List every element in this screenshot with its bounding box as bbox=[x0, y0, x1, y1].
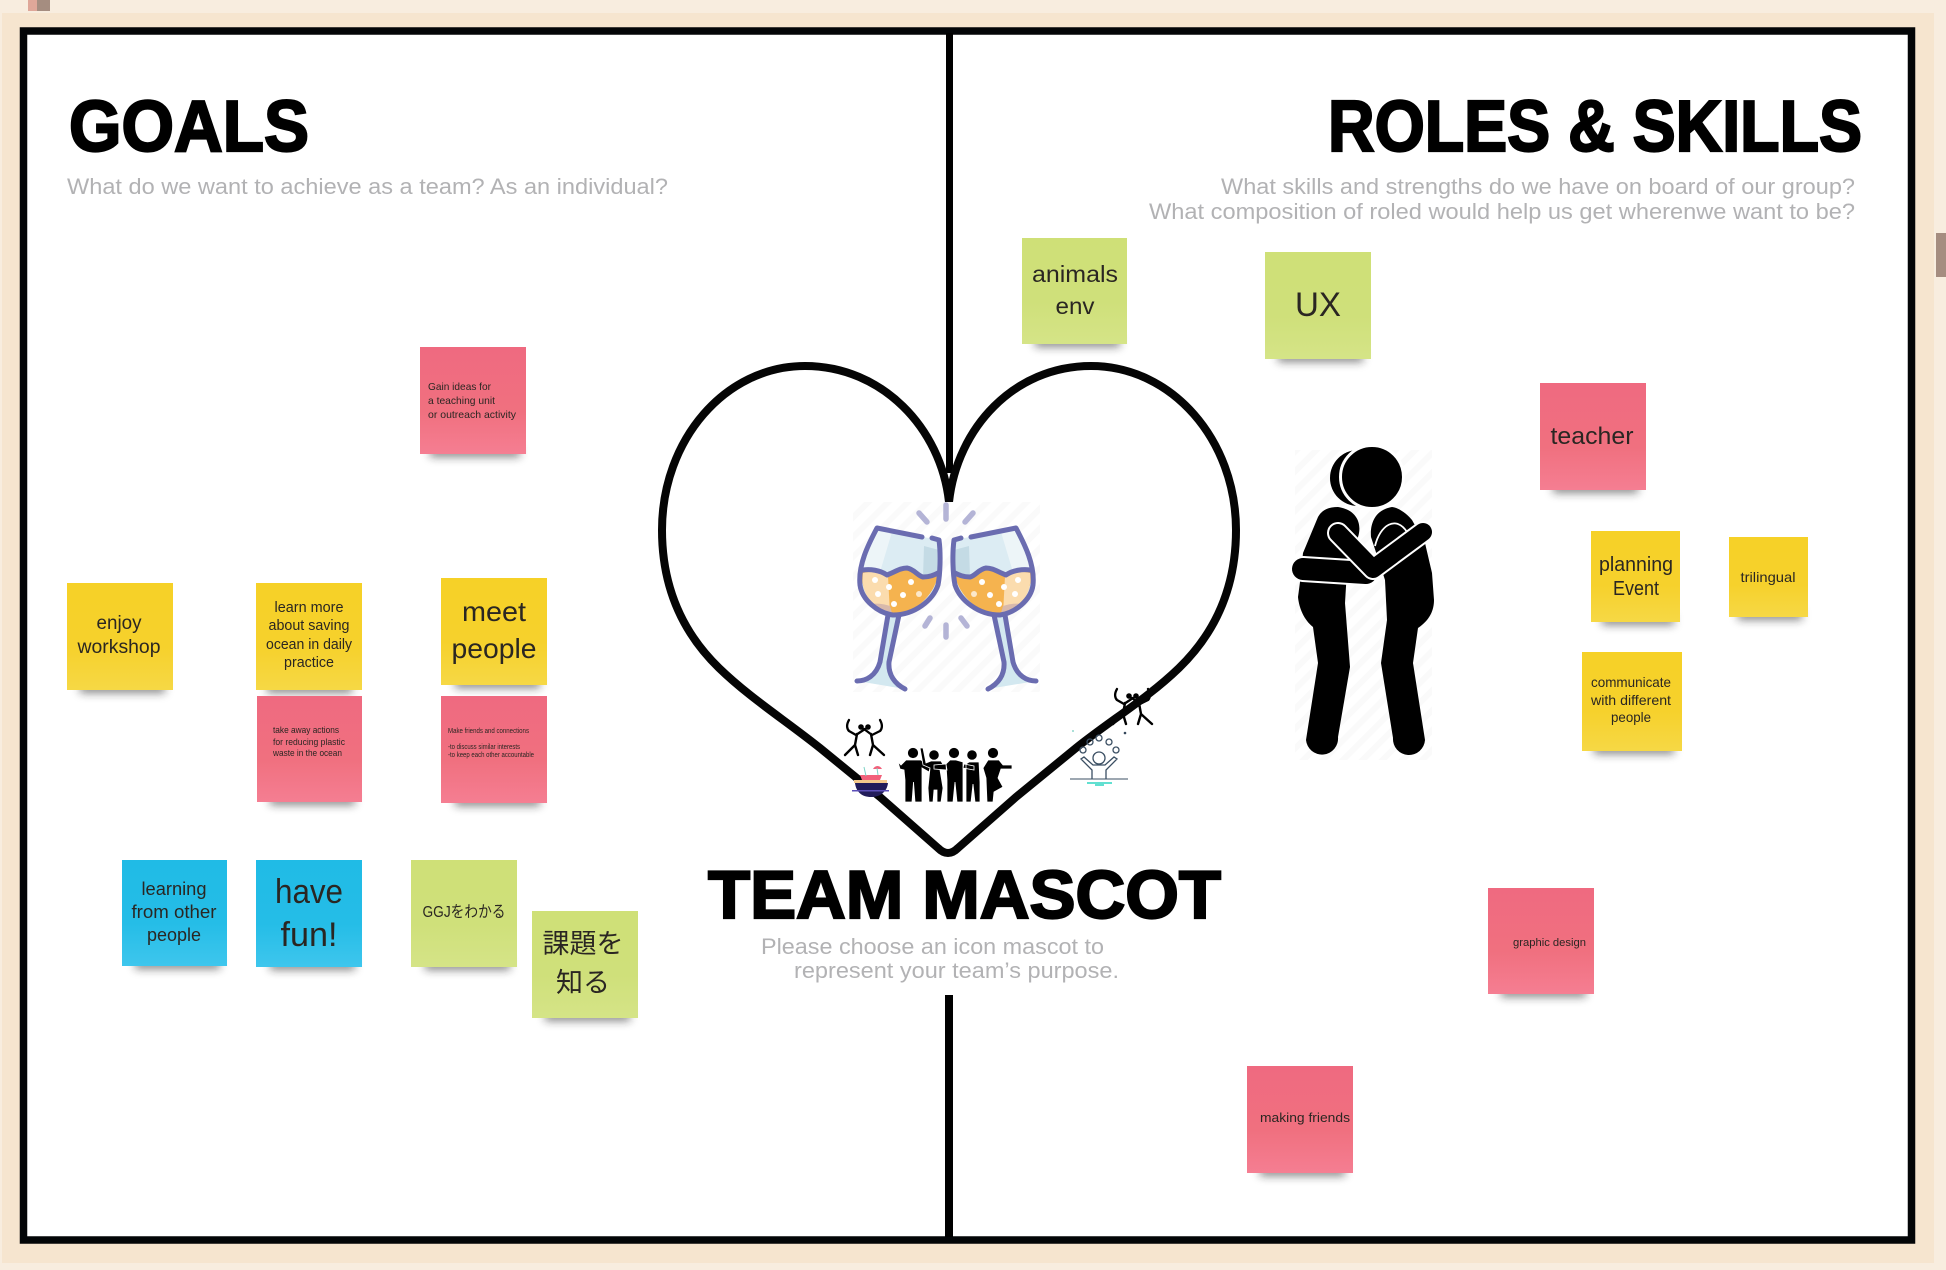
subtitle: team mascot: Please choose an icon mascot to bbox=[761, 934, 1104, 959]
sticky note: take away actions: take away actions bbox=[273, 725, 339, 736]
sticky note: planning event: planning bbox=[1599, 554, 1673, 576]
title: team mascot: TEAM MASCOT bbox=[708, 857, 1221, 933]
heart outline bbox=[662, 366, 1236, 853]
sticky note: learning from other people: from other bbox=[132, 902, 217, 922]
sticky note: learn more: about saving bbox=[268, 618, 350, 634]
icon: ice cream boat bbox=[852, 766, 889, 797]
sticky note: take away actions bbox=[257, 696, 362, 805]
icon: jumping couple upper right bbox=[1113, 689, 1152, 724]
sticky note: make friends: -to discuss similar interests bbox=[448, 744, 520, 751]
icon: clink sparks bbox=[919, 505, 973, 637]
sticky note: have fun: fun! bbox=[280, 916, 338, 954]
sticky note: animals env: animals bbox=[1032, 261, 1118, 287]
subtitle: roles and skills bbox=[1149, 174, 1855, 224]
sticky note: communicate: with different bbox=[1590, 692, 1671, 708]
hug: shoulder contour bbox=[1375, 523, 1407, 546]
sticky note: learn more: learn more bbox=[274, 600, 344, 616]
sticky note: learn the issue: 課題を bbox=[542, 929, 624, 959]
sticky note: have fun: have bbox=[275, 873, 343, 911]
sticky note: planning event bbox=[1591, 531, 1680, 625]
sticky note: gain ideas: a teaching unit bbox=[428, 395, 495, 407]
sticky note: animals env: env bbox=[1056, 293, 1095, 319]
sticky note: communicate: communicate bbox=[1591, 674, 1671, 690]
sticky note: learning from other people bbox=[122, 860, 227, 969]
sticky note: make friends: Make friends and connections bbox=[448, 728, 529, 735]
sticky note: enjoy workshop: workshop bbox=[76, 637, 160, 658]
sticky note: learn more bbox=[256, 583, 362, 693]
sticky note: GGJ: GGJをわかる bbox=[422, 903, 506, 921]
sticky note: trilingual: trilingual bbox=[1740, 569, 1796, 585]
icon: jumping couple left bbox=[845, 720, 884, 755]
sticky note: gain ideas: Gain ideas for bbox=[428, 381, 491, 393]
sticky note: learn more: practice bbox=[284, 655, 334, 671]
center divider: lower bbox=[945, 995, 953, 1237]
center divider: upper bbox=[946, 33, 953, 473]
sticky note: learn more: ocean in daily bbox=[266, 637, 353, 653]
hug: back head bbox=[1330, 450, 1386, 506]
hug: left body bbox=[1298, 507, 1359, 755]
icon: wine glasses mascot bbox=[853, 502, 1040, 692]
sticky note: enjoy workshop: enjoy bbox=[96, 613, 142, 634]
sticky note: UX bbox=[1265, 252, 1371, 362]
sticky note: meet people: meet bbox=[462, 596, 526, 627]
title: goals: GOALS bbox=[69, 87, 309, 167]
sticky note: learn the issue bbox=[532, 911, 638, 1021]
hug: front head bbox=[1340, 446, 1404, 508]
sticky note: making friends bbox=[1247, 1066, 1353, 1176]
icon: group of five people bbox=[898, 748, 1012, 802]
subtitle: team mascot bbox=[761, 934, 1119, 983]
sticky note: communicate bbox=[1582, 652, 1682, 754]
sticky note: gain ideas: or outreach activity bbox=[428, 409, 517, 421]
sticky note: have fun bbox=[256, 860, 362, 970]
sticky note: graphic design: graphic design bbox=[1513, 937, 1586, 949]
sticky note: take away actions: for reducing plastic bbox=[273, 737, 345, 748]
icon: left wine glass bbox=[857, 528, 940, 689]
sticky note: learn the issue: 知る bbox=[556, 968, 610, 998]
subtitle: roles and skills: What composition of roled would help us get wherenwe want to be? bbox=[1149, 199, 1855, 224]
icon: right wine glass bbox=[953, 528, 1036, 689]
icon: hugging figures bbox=[1295, 446, 1434, 760]
title: roles and skills: ROLES & SKILLS bbox=[1328, 87, 1862, 167]
hug: lower arm bbox=[1303, 569, 1366, 573]
hug: crossing arm bbox=[1338, 532, 1423, 569]
sticky note: meet people: people bbox=[452, 633, 536, 664]
sticky note: trilingual bbox=[1729, 537, 1808, 620]
subtitle: roles and skills: What skills and strengths do we have on board of our group? bbox=[1221, 174, 1855, 199]
sticky note: UX: UX bbox=[1295, 286, 1341, 324]
sticky note: teacher bbox=[1540, 383, 1646, 493]
sticky note: GGJ bbox=[411, 860, 517, 970]
subtitle: goals: What do we want to achieve as a team? As an individual? bbox=[67, 174, 668, 199]
sticky note: animals env bbox=[1022, 238, 1127, 347]
sticky note: graphic design bbox=[1488, 888, 1594, 997]
sticky note: meet people bbox=[441, 578, 547, 688]
icon: person in water with bubbles bbox=[1070, 730, 1128, 785]
hug: right body bbox=[1371, 507, 1434, 755]
sticky note: communicate: people bbox=[1611, 709, 1651, 725]
sticky note: take away actions: waste in the ocean bbox=[272, 748, 342, 759]
sticky note: planning event: Event bbox=[1613, 578, 1659, 600]
sticky note: enjoy workshop bbox=[67, 583, 173, 693]
sticky note: make friends: -to keep each other accountable bbox=[448, 752, 534, 759]
sticky note: make friends bbox=[441, 696, 547, 806]
sticky note: learning from other people: people bbox=[147, 925, 201, 945]
sticky note: making friends: making friends bbox=[1260, 1110, 1351, 1125]
sticky note: gain ideas bbox=[420, 347, 526, 457]
subtitle: team mascot: represent your team’s purpose. bbox=[794, 958, 1119, 983]
sticky note: teacher: teacher bbox=[1550, 423, 1634, 450]
sticky note: learning from other people: learning bbox=[142, 879, 206, 899]
